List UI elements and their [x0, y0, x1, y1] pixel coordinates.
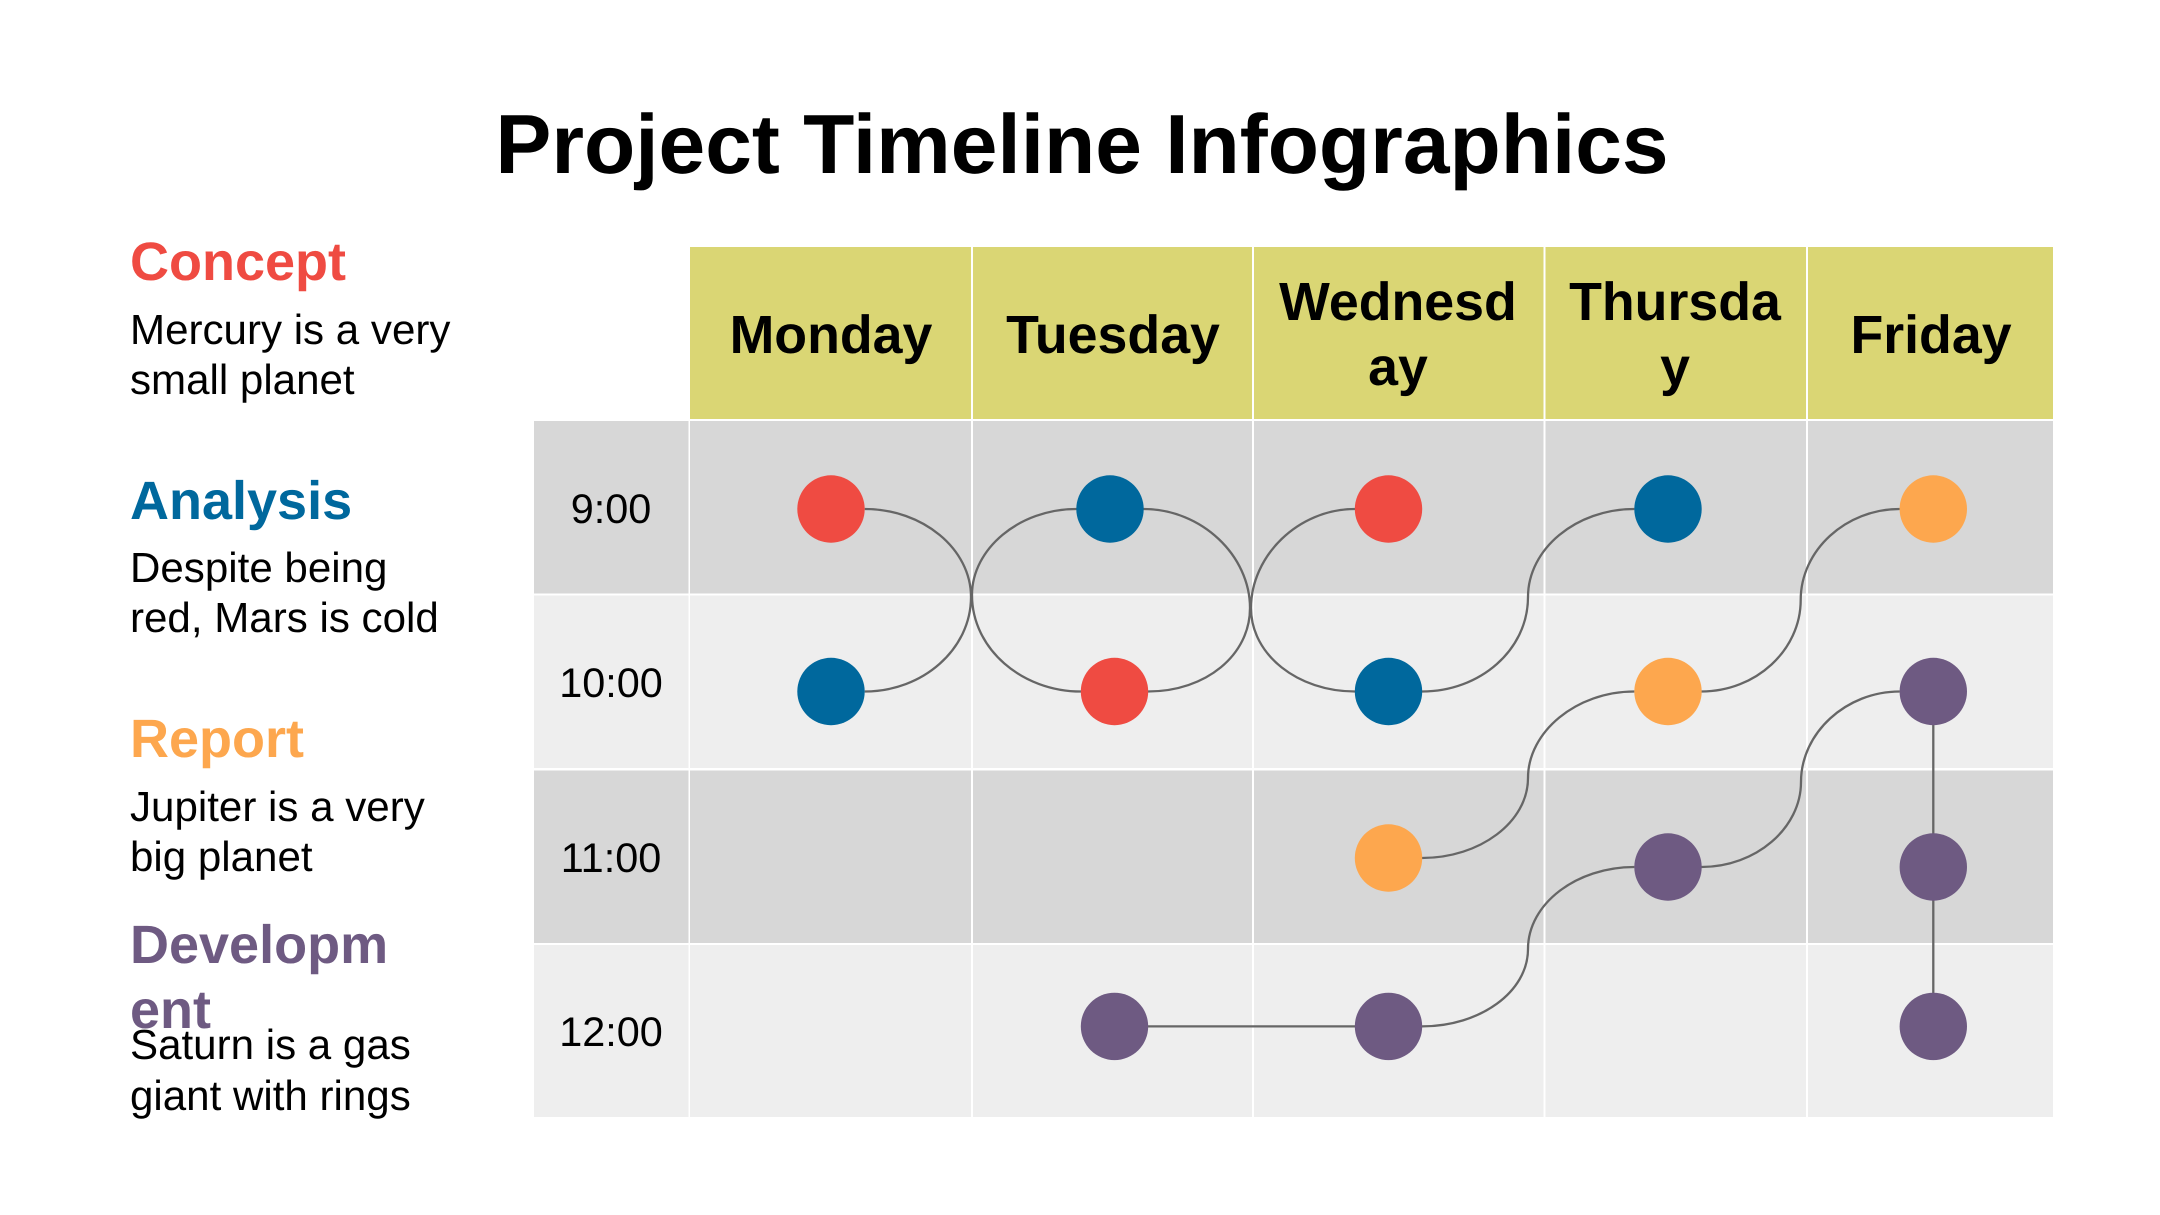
table header: days: ay	[1368, 337, 1428, 397]
legend: report: Report	[130, 709, 304, 769]
legend: concept: Mercury is a very	[130, 306, 450, 353]
table header: days: Thursda	[1569, 272, 1782, 332]
legend: concept: Concept	[130, 232, 346, 292]
markers: development dots	[1081, 658, 1967, 1060]
legend: development: Developm	[130, 915, 388, 975]
table header: days: y	[1660, 337, 1690, 397]
legend: development: Saturn is a gas	[130, 1021, 411, 1068]
panel: legend	[130, 232, 450, 1119]
table header: days: Monday	[730, 305, 933, 365]
connectors	[865, 509, 1933, 1026]
markers: analysis dots	[797, 475, 1702, 725]
markers: concept dots	[797, 475, 1422, 725]
table header: days: Wednesd	[1279, 272, 1517, 332]
table rows: time slots: 9:00	[571, 486, 651, 532]
markers: report dots	[1355, 475, 1967, 892]
legend: analysis	[130, 471, 439, 641]
legend: development: ent	[130, 980, 211, 1040]
table header: days: Friday	[1850, 305, 2012, 365]
table header: days	[690, 247, 2053, 419]
table rows: time slots: 11:00	[561, 835, 661, 881]
legend: concept	[130, 232, 450, 403]
legend: report: Jupiter is a very	[130, 783, 425, 830]
legend: report	[130, 709, 425, 880]
panel: schedule table	[534, 247, 2053, 1117]
legend: development	[130, 915, 411, 1119]
legend: development: giant with rings	[130, 1072, 411, 1119]
table rows: time slots	[534, 421, 2053, 1117]
table rows: time slots: 12:00	[559, 1009, 663, 1055]
table rows: time slots: 10:00	[559, 660, 663, 706]
title: Project Timeline Infographics	[495, 97, 1669, 191]
legend: report: big planet	[130, 833, 313, 880]
table header: days: Tuesday	[1006, 305, 1220, 365]
legend: concept: small planet	[130, 356, 355, 403]
legend: analysis: Despite being	[130, 544, 387, 591]
legend: analysis: Analysis	[130, 471, 352, 531]
legend: analysis: red, Mars is cold	[130, 594, 439, 641]
